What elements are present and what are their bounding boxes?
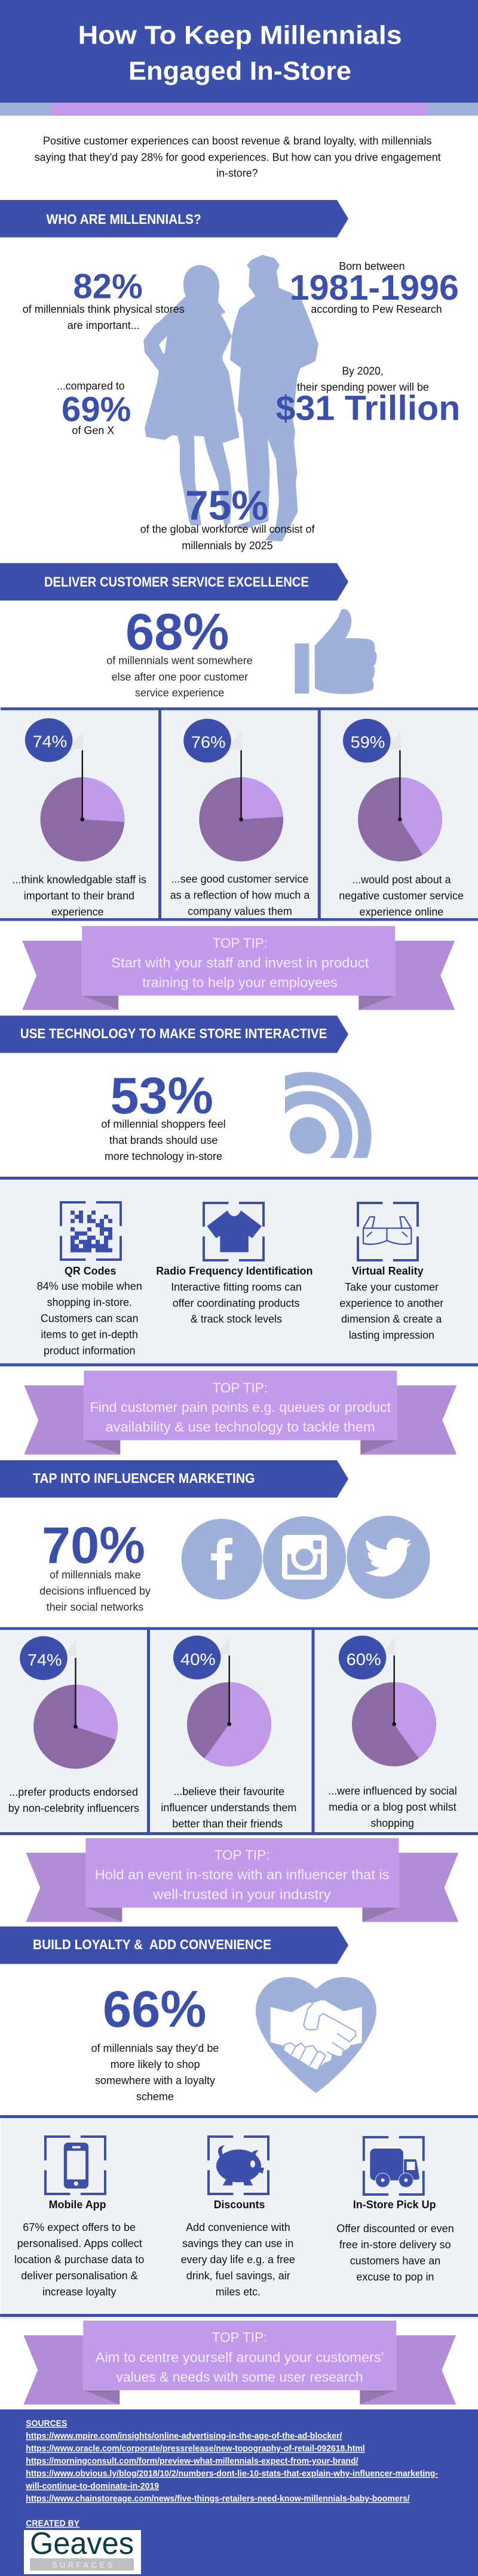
sources list: https://www.oracle.com/corporate/pressrelease/new-topography-of-retail-092618.html [26, 2443, 365, 2454]
feature: radio frequency identification: Radio Frequency Identification [156, 1265, 313, 1277]
feature: in-store pick up: customers have an [350, 2255, 440, 2267]
feature: in-store pick up: excuse to pop in [356, 2271, 434, 2283]
feature: virtual reality: Take your customer [345, 1281, 439, 1293]
stat: 82% [23, 267, 185, 331]
top tip ribbon 4: values & needs with some user research [116, 2369, 363, 2384]
stat column: 74% knowledgable staff: ...think knowledgable staff is [12, 874, 146, 886]
panel: influencer stats [0, 1627, 478, 1835]
intro text: in-store? [216, 167, 258, 179]
top tip ribbon 4 [23, 2320, 456, 2405]
section heading: customer service [0, 563, 348, 601]
feature: mobile app: location & purchase data to [14, 2254, 144, 2266]
feature: mobile app: increase loyalty [42, 2286, 116, 2298]
stat: 66%: somewhere with a loyalty [95, 2075, 215, 2086]
feature: virtual reality: experience to another [339, 1297, 443, 1309]
intro text: Positive customer experiences can boost revenue & brand loyalty, with millennials [43, 135, 431, 147]
feature: virtual reality: dimension & create a [341, 1313, 442, 1325]
stat: 53%: that brands should use [109, 1134, 217, 1146]
stat: 53%: more technology in-store [105, 1150, 222, 1162]
feature: discounts: Add convenience with [186, 2221, 290, 2233]
stat: 69% [57, 380, 131, 436]
sources list: https://www.mpire.com/insights/online-advertising-in-the-age-of-the-ad-blocker/ [26, 2431, 342, 2441]
stat: 1981-1996: Born between [339, 260, 405, 272]
section heading: influencer marketing: TAP INTO INFLUENCER MARKETING [33, 1470, 255, 1486]
stat column: 60% social media or blog post: ...were influenced by social [328, 1785, 457, 1797]
stat: 75%: of the global workforce will consist of [140, 524, 315, 535]
stat column: 76% customer service reflection: as a reflection of how much a [170, 890, 310, 901]
top tip ribbon 3: well-trusted in your industry [152, 1886, 331, 1902]
stat: 1981-1996: according to Pew Research [311, 303, 442, 315]
feature: mobile app: 67% expect offers to be [23, 2221, 136, 2233]
stat column: 40% favourite influencer: 40% [180, 1650, 216, 1669]
section heading: technology: USE TECHNOLOGY TO MAKE STORE INTERACTIVE [20, 1026, 327, 1041]
stat column: 74% non-celebrity influencers [8, 1636, 139, 1814]
feature: in-store pick up: Offer discounted or even [336, 2223, 454, 2235]
feature: QR codes: 84% use mobile when [37, 1281, 142, 1292]
stat column: 60% social media or blog post: media or a blog post whilst [329, 1801, 456, 1813]
title: Engaged In-Store [128, 57, 351, 86]
stat column: 76% customer service reflection: company values them [188, 905, 292, 917]
top tip ribbon 3: TOP TIP: [215, 1847, 270, 1863]
feature: discounts: miles etc. [216, 2286, 261, 2298]
top tip ribbon 1: training to help your employees [142, 975, 338, 990]
feature: discounts: Discounts [214, 2199, 265, 2211]
top tip ribbon 1: TOP TIP: [213, 935, 268, 950]
stat: 66% [91, 1981, 219, 2103]
icon: wifi signal [285, 1072, 372, 1158]
title [78, 20, 402, 86]
logo: Geaves Surfaces: SURFACES [52, 2560, 113, 2569]
top tip ribbon 3 [26, 1838, 458, 1922]
stat: 75%: 75% [185, 482, 268, 529]
stat: 1981-1996: 1981-1996 [290, 268, 459, 307]
sources list: https://www.chainstoreage.com/news/five-things-retailers-need-know-millennials-baby-boomers/ [26, 2494, 410, 2504]
stat column: 76% customer service reflection [170, 719, 310, 917]
stat: 70%: decisions influenced by [39, 1585, 151, 1597]
section heading: loyalty and convenience [0, 1926, 348, 1964]
feature: virtual reality [339, 1203, 443, 1341]
feature: discounts [181, 2137, 295, 2298]
stat column: 74% knowledgable staff: experience [51, 906, 104, 918]
logo: Geaves Surfaces [24, 2526, 141, 2574]
stat column: 60% social media or blog post: 60% [347, 1650, 381, 1669]
illustration: couple silhouette [143, 255, 318, 541]
icon: thumbs up [295, 609, 377, 694]
header panel [0, 0, 478, 116]
stat: 70%: their social networks [47, 1601, 143, 1613]
stat: 69%: of Gen X [72, 424, 114, 436]
stat: 68%: 68% [125, 604, 229, 661]
stat column: 40% favourite influencer [161, 1636, 296, 1830]
stat: $31 Trillion: By 2020, [342, 365, 384, 377]
stat: 53% [101, 1067, 226, 1162]
stat column: 74% non-celebrity influencers: 74% [27, 1651, 62, 1669]
feature: in-store pick up: In-Store Pick Up [353, 2199, 436, 2211]
feature: QR codes: QR Codes [65, 1265, 116, 1277]
feature: discounts: every day life e.g. a free [181, 2254, 295, 2266]
top tip ribbon 2: Find customer pain points e.g. queues or product [90, 1399, 391, 1415]
feature: mobile app [14, 2137, 144, 2298]
feature: QR codes: Customers can scan [41, 1312, 139, 1324]
stat: 70% [39, 1517, 151, 1613]
stat: 68%: of millennials went somewhere [106, 655, 253, 667]
top tip ribbon 3: Hold an event in-store with an influencer that is [95, 1867, 389, 1882]
title: How To Keep Millennials [78, 20, 402, 50]
stat column: 59% negative post: ...would post about a [352, 874, 452, 886]
feature: virtual reality: Virtual Reality [352, 1265, 424, 1277]
section heading: who are millennials: WHO ARE MILLENNIALS? [47, 211, 201, 227]
feature: radio frequency identification: Interactive fitting rooms can [171, 1281, 302, 1293]
top tip ribbon 4: TOP TIP: [212, 2329, 267, 2345]
stat: 53%: of millennial shoppers feel [101, 1118, 226, 1130]
stat column: 59% negative post: negative customer service [339, 890, 464, 901]
sources list: SOURCES [26, 2418, 67, 2429]
stat column: 76% customer service reflection: ...see good customer service [171, 873, 308, 885]
feature: mobile app: Mobile App [49, 2199, 106, 2211]
stat: $31 Trillion: $31 Trillion [276, 389, 460, 427]
top tip ribbon 4: Aim to centre yourself around your customers' [96, 2349, 384, 2365]
top tip ribbon 1 [22, 926, 455, 1010]
intro text: saying that they'd pay 28% for good experiences. But how can you drive engagement [35, 151, 441, 163]
icon: instagram [263, 1516, 346, 1599]
section heading: loyalty and convenience: BUILD LOYALTY & ADD CONVENIENCE [33, 1937, 271, 1952]
footer panel: sources and credit [0, 2409, 478, 2576]
feature: radio frequency identification: & track stock levels [191, 1313, 282, 1325]
created by label: CREATED BY [26, 2519, 79, 2529]
stat: 68%: service experience [135, 687, 224, 699]
top tip ribbon 2: TOP TIP: [213, 1380, 268, 1396]
feature: discounts: savings they can use in [182, 2238, 293, 2249]
stat: 53%: 53% [111, 1067, 213, 1125]
stat: $31 Trillion [276, 365, 460, 427]
stat column: 74% knowledgable staff: important to their brand [24, 890, 134, 901]
stat column: 74% non-celebrity influencers: ...prefer products endorsed [9, 1786, 138, 1798]
section heading: influencer marketing [0, 1460, 348, 1498]
stat: 82%: are important... [68, 319, 140, 331]
section heading: who are millennials [0, 200, 348, 238]
stat: 82%: of millennials think physical stores [23, 303, 185, 315]
feature: mobile app: personalised. Apps collect [17, 2238, 142, 2249]
top tip ribbon 2: availability & use technology to tackle them [105, 1419, 375, 1435]
feature: QR codes: product information [44, 1344, 135, 1356]
sources list: will-continue-to-dominate-in-2019 [25, 2481, 159, 2491]
stat column: 40% favourite influencer: better than their friends [172, 1818, 283, 1830]
stat: 68% [106, 604, 253, 699]
feature: QR codes: items to get in-depth [41, 1328, 138, 1340]
stat column: 60% social media or blog post [328, 1636, 457, 1829]
feature: QR codes: shopping in-store. [47, 1297, 132, 1309]
panel: loyalty and convenience examples [0, 2115, 478, 2319]
stat: 69%: 69% [62, 390, 131, 429]
stat column: 59% negative post [339, 719, 464, 918]
stat column: 76% customer service reflection: 76% [191, 733, 226, 752]
stat column: 59% negative post: experience online [360, 906, 443, 918]
feature: QR codes [37, 1202, 142, 1356]
feature: radio frequency identification [156, 1203, 313, 1325]
stat: 70%: 70% [42, 1517, 145, 1574]
stat column: 59% negative post: 59% [351, 733, 385, 752]
top tip ribbon 2 [24, 1371, 456, 1454]
feature: virtual reality: lasting impression [349, 1329, 434, 1341]
stat column: 60% social media or blog post: shopping [370, 1817, 414, 1829]
feature: discounts: drink, fuel savings, air [186, 2270, 290, 2282]
intro text [35, 135, 441, 179]
feature: in-store pick up: free in-store delivery so [339, 2239, 451, 2251]
stat: 68%: else after one poor customer [112, 671, 248, 683]
icon: heart with handshake [256, 1977, 376, 2093]
feature: in-store pick up [336, 2137, 454, 2283]
icon: twitter [347, 1516, 430, 1599]
stat: 70%: of millennials make [50, 1569, 141, 1581]
stat: 66%: more likely to shop [111, 2058, 200, 2070]
sources list: https://www.obvious.ly/blog/2018/10/2/numbers-dont-lie-10-stats-that-explain-why-influencer-marketing- [26, 2469, 438, 2479]
stat column: 74% knowledgable staff: 74% [33, 732, 67, 750]
stat column: 40% favourite influencer: influencer understands them [161, 1802, 296, 1814]
logo: Geaves Surfaces: Geaves [30, 2526, 134, 2561]
sources list [25, 2418, 438, 2504]
stat: 69%: ...compared to [57, 380, 125, 392]
sources list: https://morningconsult.com/form/preview-what-millennials-expect-from-your-brand/ [26, 2456, 358, 2466]
section heading: technology [0, 1015, 348, 1053]
stat: $31 Trillion: their spending power will be [297, 381, 429, 393]
stat: 82%: 82% [73, 267, 143, 306]
stat column: 40% favourite influencer: ...believe their favourite [173, 1786, 284, 1798]
stat: 66%: of millennials say they'd be [91, 2042, 219, 2054]
icon: facebook [182, 1519, 262, 1599]
feature: mobile app: deliver personalisation & [21, 2270, 138, 2282]
panel: customer service stats [0, 707, 478, 921]
stat: 66%: scheme [136, 2091, 174, 2103]
feature: radio frequency identification: offer coordinating products [173, 1297, 300, 1309]
stat: 75%: millennials by 2025 [182, 540, 273, 552]
stat: 75% [140, 482, 315, 552]
stat column: 74% non-celebrity influencers: by non-celebrity influencers [8, 1802, 139, 1814]
top tip ribbon 1: Start with your staff and invest in product [111, 955, 369, 970]
section heading: customer service: DELIVER CUSTOMER SERVICE EXCELLENCE [44, 574, 309, 590]
stat: 66%: 66% [103, 1981, 206, 2038]
stat column: 74% knowledgable staff [12, 718, 146, 918]
panel: technology examples [0, 1177, 478, 1367]
